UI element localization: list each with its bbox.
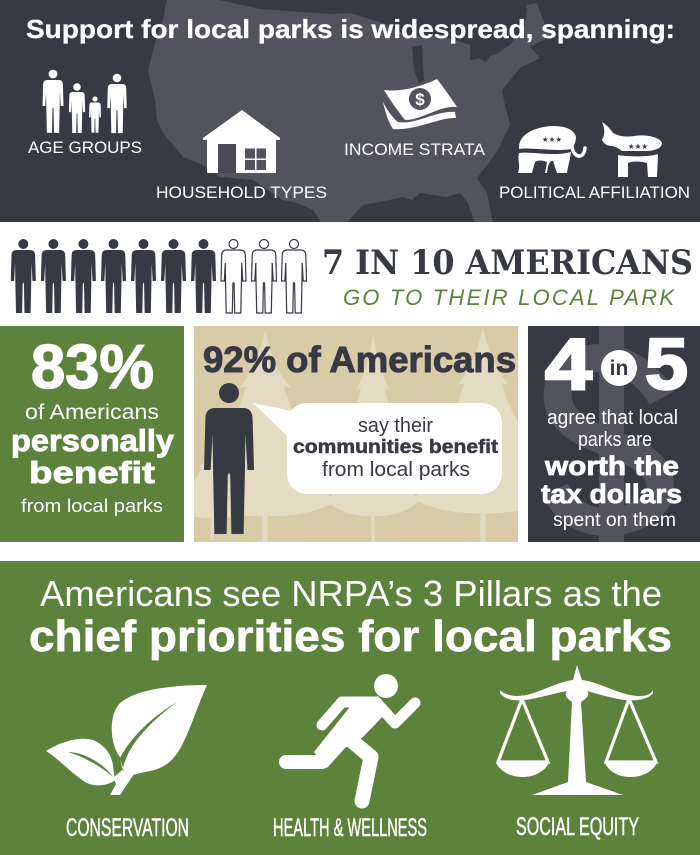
text: tax dollars: tax dollars [541, 479, 682, 509]
icon: leaf [46, 685, 207, 795]
icon: elephant and donkey: ★★★ [542, 135, 562, 144]
subhead: go to their local park: GO TO THEIR LOCAL PARK [343, 285, 675, 310]
text: worth the: worth the [544, 451, 679, 481]
icon: age groups family [42, 70, 127, 133]
stat: 4 in 5 [545, 325, 688, 405]
icon: elephant and donkey [518, 122, 662, 177]
stat: 4 in 5: 5 [645, 325, 688, 405]
text: personally: personally [11, 423, 175, 458]
panel: 83% personally benefit [0, 326, 184, 542]
text: say their: say their [358, 415, 433, 437]
heading: 92% of Americans: 92% of Americans [203, 339, 516, 380]
text: agree that local: agree that local [547, 407, 678, 429]
text: benefit: benefit [29, 455, 155, 490]
icon: runner [286, 674, 415, 801]
trees background [194, 328, 518, 542]
heading: Support for local parks is widespread, spanning: [26, 14, 675, 44]
text: from local parks: from local parks [21, 496, 163, 516]
icon: elephant and donkey: ★★★ [628, 142, 648, 151]
icon: money [383, 79, 457, 129]
speech bubble [253, 403, 502, 494]
icon: house [203, 110, 280, 173]
heading line 2: chief priorities for local parks [29, 612, 672, 661]
icon: money: $ [415, 90, 425, 109]
label: age groups: AGE GROUPS [28, 138, 142, 157]
dollar sign background [555, 326, 662, 542]
text: spent on them: spent on them [553, 510, 676, 531]
label: conservation: CONSERVATION [66, 814, 189, 842]
panel: support for local parks [0, 0, 700, 224]
label: income strata: INCOME STRATA [344, 140, 486, 159]
text: parks are: parks are [578, 429, 652, 451]
panel: 4 in 5 [528, 325, 700, 542]
stat: 4 in 5: 4 [545, 325, 592, 405]
stat: 4 in 5: in [610, 357, 628, 380]
heading line 1: Americans see NRPA’s 3 Pillars as the [40, 573, 662, 614]
map of the United States [148, 0, 553, 224]
text: from local parks: from local parks [322, 459, 470, 481]
panel: 3 pillars [0, 561, 700, 855]
label: health and wellness: HEALTH & WELLNESS [273, 814, 427, 842]
icon: scales [496, 665, 657, 795]
label: household types: HOUSEHOLD TYPES [156, 183, 327, 202]
stat: 83%: 83% [31, 333, 154, 402]
pictogram: 7 of 10 people [11, 239, 307, 313]
panel: 92% of Americans [194, 326, 518, 542]
text: communities benefit: communities benefit [293, 437, 499, 458]
label: political affiliation: POLITICAL AFFILIATION [499, 183, 690, 202]
text: of Americans: of Americans [25, 401, 159, 424]
icon: person [204, 383, 254, 534]
